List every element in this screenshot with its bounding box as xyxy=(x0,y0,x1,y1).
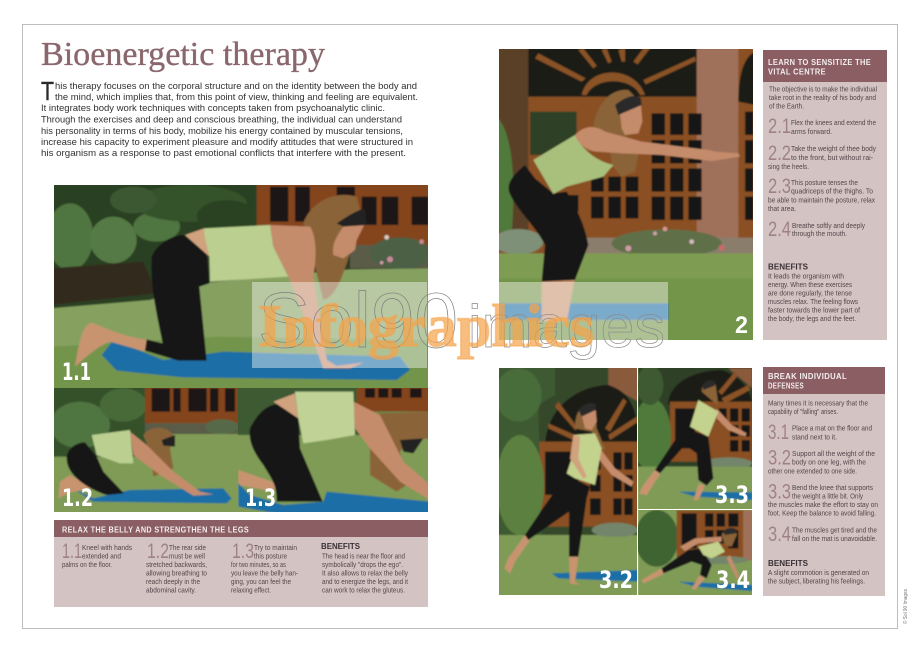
label 1.1: 1.1 xyxy=(62,358,91,386)
benefits 2: are done regularly, the tense xyxy=(768,290,852,298)
step 1.3: you leave the belly han- xyxy=(231,570,298,578)
step 2.1: arms forward. xyxy=(791,129,832,136)
step 1.1 xyxy=(62,540,133,569)
watermark xyxy=(252,276,668,368)
label 3.2: 3.2 xyxy=(599,566,633,594)
step 1.2: reach deeply in the xyxy=(146,579,200,586)
objective: of the Earth. xyxy=(769,104,804,110)
photo 1.2: stretching back xyxy=(50,385,240,518)
benefits 2 xyxy=(768,262,860,323)
benefits 1: The head is near the floor and xyxy=(322,554,405,560)
step 2.3: be able to maintain the posture, relax xyxy=(768,198,876,204)
label 3.3: 3.3 xyxy=(715,481,749,509)
step 2.2: Take the weight of thee body xyxy=(791,146,877,153)
step 1.2: abdominal cavity. xyxy=(146,588,196,594)
step 2.2: 2.2 xyxy=(768,142,791,165)
panel header: RELAX THE BELLY AND STRENGTHEN THE LEGS xyxy=(62,524,249,534)
step 1.2: 1.2 xyxy=(147,540,169,563)
step 1.3: ging, you can feel the xyxy=(231,579,291,586)
title: Bioenergetic therapy xyxy=(41,36,325,73)
step 1.2 xyxy=(146,540,207,594)
step 1.1: Kneel with hands xyxy=(82,545,133,552)
step 3.3: the muscles make the effort to stay on xyxy=(768,502,878,509)
step 1.3: for two minutes, so as xyxy=(231,562,286,569)
panel: break individual defenses xyxy=(763,367,885,596)
benefits 1: can work to relax the gluteus. xyxy=(322,588,405,594)
introduction: capability of "falling" arises. xyxy=(768,409,838,416)
introduction: Many times it is necessary that the xyxy=(768,400,868,408)
step 1.3: Try to maintain xyxy=(254,545,297,552)
label 2: 2 xyxy=(735,312,748,339)
step 3.3: 3.3 xyxy=(768,480,791,504)
step 1.2: must be well xyxy=(169,554,205,560)
step 1.3: this posture xyxy=(254,554,287,560)
benefits 2: faster towards the lower part of xyxy=(768,308,860,314)
step 3.2: body on one leg, with the xyxy=(792,460,866,466)
intro text block: his organism as a response to past emotional conflicts that interfere with the present. xyxy=(41,147,406,158)
step 2.1: 2.1 xyxy=(768,115,791,138)
benefits 1: symbolically "drops the ego". xyxy=(322,562,403,569)
panel: relax the belly and strengthen the legs xyxy=(54,520,428,607)
step 1.2: The rear side xyxy=(169,545,206,552)
benefits 3 xyxy=(768,558,869,586)
drop cap: T xyxy=(41,76,54,106)
step 3.2: other one extended to one side. xyxy=(768,468,857,476)
step 2.4 xyxy=(768,218,866,241)
panel header xyxy=(763,50,887,82)
step 2.3: 2.3 xyxy=(768,175,791,198)
step 2.3 xyxy=(768,175,876,213)
step 3.2: Support all the weight of the xyxy=(792,451,875,458)
photo 3.2: standing on one leg xyxy=(495,365,638,600)
label 3.4: 3.4 xyxy=(716,566,750,594)
panel header: VITAL CENTRE xyxy=(768,66,826,76)
step 1.1: 1.1 xyxy=(62,540,82,563)
watermark: Infographics xyxy=(258,293,594,359)
benefits 1: It also allows to relax the belly xyxy=(322,570,409,578)
label 1.3: 1.3 xyxy=(245,484,276,512)
intro text block: It integrates body work techniques with concepts taken from psychoanalytic clinic. xyxy=(41,102,385,113)
photo 1.1: kneeling on all fours xyxy=(47,180,433,393)
intro text block: his personality in terms of his body, mobilize his energy contained by muscular tensions, xyxy=(41,125,403,136)
panel header: BREAK INDIVIDUAL xyxy=(768,371,847,381)
step 3.1: Place a mat on the floor and xyxy=(792,426,872,432)
panel: learn to sensitize the vital centre xyxy=(763,50,887,340)
step 3.2: 3.2 xyxy=(768,446,791,470)
step 1.2: allowing breathing to xyxy=(146,570,207,578)
step 3.3: Bend the knee that supports xyxy=(792,485,874,492)
panel header xyxy=(763,367,885,394)
intro text block xyxy=(41,76,418,158)
panel header: DEFENSES xyxy=(768,380,804,390)
benefits 2: muscles relax. The feeling flows xyxy=(768,299,858,306)
step 2.3: This posture tenses the xyxy=(791,180,858,187)
step 1.1: extended and xyxy=(82,554,121,560)
step 2.2: to the front, but without rai- xyxy=(791,155,873,162)
benefits 1: and to energize the legs, and it xyxy=(322,579,408,586)
benefits 3: A slight commotion is generated on xyxy=(768,570,869,577)
objective: The objective is to make the individual xyxy=(769,86,877,94)
intro text block: the mind, which implies that, from this point of view, thinking and feeling are equivalent. xyxy=(55,91,418,102)
copyright credit: © Sol 90 Images xyxy=(902,589,909,624)
step 1.3: relaxing effect. xyxy=(231,588,271,594)
benefits 2: energy. When these exercises xyxy=(768,282,852,289)
step 2.4: 2.4 xyxy=(768,218,791,241)
step 2.1: Flex the knees and extend the xyxy=(791,120,876,127)
photo 1.3: close-up stretch xyxy=(237,385,430,518)
step 2.3: quadriceps of the thighs. To xyxy=(791,188,873,196)
benefits 3: BENEFITS xyxy=(768,558,808,568)
watermark: Sol90 xyxy=(258,276,458,364)
introduction xyxy=(768,400,868,416)
step 1.3 xyxy=(231,540,298,594)
photo 2: squat with arms extended xyxy=(493,45,762,347)
step 2.4: through the mouth. xyxy=(792,231,847,238)
step 3.4: fall on the mat is unavoidable. xyxy=(792,536,877,543)
panel header xyxy=(54,520,428,537)
step 3.2 xyxy=(768,446,875,476)
benefits 2: It leads the organism with xyxy=(768,274,844,280)
benefits 1: BENEFITS xyxy=(321,541,360,551)
step 1.3: 1.3 xyxy=(232,540,254,563)
step 2.2 xyxy=(768,142,877,171)
watermark: images xyxy=(468,293,665,360)
step 1.1: palms on the floor. xyxy=(62,562,112,569)
step 3.1: stand next to it. xyxy=(792,434,837,442)
step 3.1: 3.1 xyxy=(768,421,789,444)
step 3.4 xyxy=(768,523,877,546)
intro text block: Through the exercises and deep and conscious breathing, the individual can understand xyxy=(41,114,402,124)
benefits 2: BENEFITS xyxy=(768,262,808,272)
step 3.4: The muscles get tired and the xyxy=(792,528,877,534)
benefits 1 xyxy=(321,541,409,594)
label 1.2: 1.2 xyxy=(62,484,93,512)
step 2.3: that area. xyxy=(768,206,796,213)
photo 3.3: leg extended xyxy=(638,368,752,509)
step 3.3 xyxy=(768,480,878,518)
benefits 2: the body, the legs and the feet. xyxy=(768,316,856,323)
step 2.1 xyxy=(768,115,876,138)
step 3.3: the weight a little bit. Only xyxy=(792,494,863,500)
step 2.4: Breathe softly and deeply xyxy=(792,223,866,230)
intro text block: his therapy focuses on the corporal structure and on the identity between the body and xyxy=(55,80,417,91)
step 1.2: stretched backwards, xyxy=(146,562,207,569)
step 3.4: 3.4 xyxy=(768,523,791,546)
panel header: LEARN TO SENSITIZE THE xyxy=(768,57,871,67)
objective: take root in the reality of his body and xyxy=(769,95,876,102)
objective xyxy=(769,86,877,110)
photo 3.4: falling xyxy=(635,508,754,598)
step 2.2: sing the heels. xyxy=(768,164,809,171)
benefits 3: the subject, liberating his feelings. xyxy=(768,578,865,586)
step 3.1 xyxy=(768,421,872,444)
intro text block: increase his capacity to experiment pleasure and modify attitudes that were structured in xyxy=(41,136,413,147)
step 3.3: foot. Keep the balance to avoid falling. xyxy=(768,510,876,518)
